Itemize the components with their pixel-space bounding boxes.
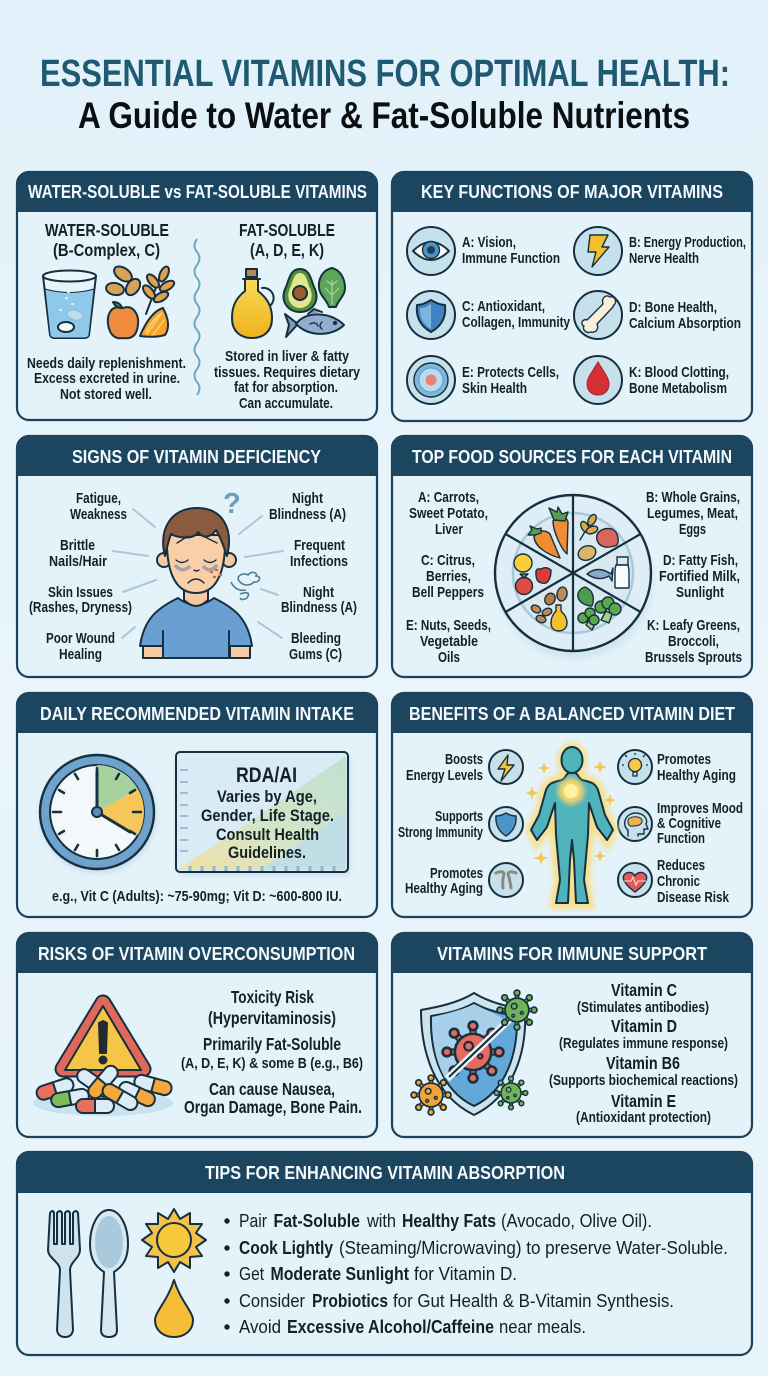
text: toxicity risk: (Hypervitaminosis) — [208, 1008, 336, 1028]
benefit labels left: Boosts — [445, 751, 483, 768]
column title: fat-soluble: (A, D, E, K) — [250, 240, 324, 260]
text: RDA/AI: Varies by Age, — [217, 787, 317, 806]
icon: heart — [618, 863, 652, 897]
panel: food sources — [392, 436, 752, 677]
connector lines — [113, 509, 283, 638]
text: immune vitamins — [549, 980, 738, 1126]
benefit labels left — [398, 751, 483, 897]
panel: absorption tips — [17, 1152, 752, 1355]
icon: pile of pills — [33, 1063, 173, 1116]
text: symptoms: Can cause Nausea, — [209, 1079, 335, 1099]
text: primarily fat-soluble: (A, D, E, K) & some B (e.g., B6) — [181, 1055, 363, 1072]
text: RDA/AI: RDA/AI — [236, 764, 297, 787]
icon: oil bottle — [232, 269, 274, 338]
food labels right: Legumes, Meat, — [647, 505, 738, 522]
food labels left: E: Nuts, Seeds, — [406, 617, 491, 634]
text: vitamin D: D: Bone Health, — [629, 299, 717, 316]
panel: deficiency signs — [17, 436, 377, 677]
tip 4: Probiotics — [312, 1291, 388, 1311]
text: vitamin E: Skin Health — [462, 380, 527, 397]
text: vitamin E: E: Protects Cells, — [462, 364, 559, 381]
benefit labels right: Chronic — [657, 873, 700, 890]
card: RDA/AI chart card — [176, 752, 350, 875]
text: fat-soluble notes: Stored in liver & fatty — [225, 348, 350, 365]
tip 1 — [224, 1211, 652, 1231]
text: vitamin A: A: Vision, — [462, 234, 516, 251]
panel: overconsumption risks — [17, 933, 377, 1137]
icon: shield — [407, 291, 455, 339]
text: immune vitamins: Vitamin E — [611, 1091, 676, 1111]
food labels left: Vegetable — [420, 633, 478, 650]
text: vitamin C: C: Antioxidant, — [462, 298, 545, 315]
benefit labels left: Energy Levels — [406, 767, 483, 784]
tip 3: for Vitamin D. — [414, 1264, 517, 1284]
food labels right: Brussels Sprouts — [645, 649, 742, 666]
icon: shield with viruses — [411, 990, 537, 1115]
text: water-soluble notes: Not stored well. — [60, 386, 152, 403]
symptom labels left: Fatigue, — [76, 490, 121, 507]
food labels right: Broccoli, — [668, 633, 719, 650]
tip 4: Consider — [239, 1291, 305, 1311]
tip 2: (Steaming/Microwaving) to preserve Water-Soluble. — [339, 1238, 728, 1258]
tip 1: with — [366, 1211, 396, 1231]
icon: fork — [48, 1211, 80, 1337]
symptom labels left: Skin Issues — [48, 584, 113, 601]
icon: energy — [489, 750, 523, 784]
food labels left: C: Citrus, — [421, 552, 475, 569]
food: greens and broccoli — [578, 587, 621, 630]
benefit labels right: Improves Mood — [657, 800, 743, 817]
panel: daily intake — [17, 693, 377, 917]
heading: intake: DAILY RECOMMENDED VITAMIN INTAKE — [40, 703, 354, 724]
text: symptoms — [184, 1079, 362, 1117]
food labels left: Bell Peppers — [412, 584, 484, 601]
text: immune vitamins: (Stimulates antibodies) — [577, 999, 709, 1016]
symptom labels right: Gums (C) — [289, 646, 342, 663]
food labels left: Sweet Potato, — [409, 505, 488, 522]
tip 3: Get — [239, 1264, 264, 1284]
text: vitamin C — [462, 298, 571, 331]
symptom labels right: Infections — [290, 553, 348, 570]
text: vitamin K — [629, 364, 729, 397]
text: water-soluble notes: Excess excreted in urine. — [34, 370, 180, 387]
heading: key functions: KEY FUNCTIONS OF MAJOR VITAMINS — [421, 181, 723, 202]
food: fish and milk — [587, 557, 629, 588]
food labels right: K: Leafy Greens, — [647, 617, 740, 634]
text: RDA/AI: Gender, Life Stage. — [201, 806, 334, 825]
heading: immune support: VITAMINS FOR IMMUNE SUPPORT — [437, 943, 708, 964]
benefit labels right: Healthy Aging — [657, 767, 736, 784]
text: fat-soluble notes — [214, 348, 361, 412]
icon: blood drop — [574, 356, 622, 404]
food: carrots — [528, 507, 568, 558]
food: nuts and oil — [530, 586, 568, 631]
tip 3 — [224, 1264, 517, 1284]
benefit labels right: Function — [657, 830, 705, 847]
icon: avocado and leaf — [284, 268, 345, 312]
tip 1: Pair — [239, 1211, 267, 1231]
benefit labels left: Strong Immunity — [398, 824, 483, 841]
text: vitamin K: K: Blood Clotting, — [629, 364, 729, 381]
symptom labels right: Bleeding — [291, 630, 341, 647]
food labels left: A: Carrots, — [418, 489, 479, 506]
food labels right: Sunlight — [676, 584, 724, 601]
food labels right — [645, 489, 742, 666]
column title: water-soluble — [45, 220, 169, 260]
text: immune vitamins: (Antioxidant protection) — [576, 1109, 711, 1126]
text: vitamin E — [462, 364, 559, 397]
illustration: tired person — [140, 508, 252, 658]
tip 3: Moderate Sunlight — [270, 1264, 409, 1284]
icon: eye — [407, 227, 455, 275]
tip 1: (Avocado, Olive Oil). — [501, 1211, 652, 1231]
icon: light bulb — [618, 750, 652, 784]
icon: warning triangle — [63, 1003, 143, 1070]
icon: question mark: ? — [223, 488, 241, 520]
chart: divided food plate — [495, 495, 653, 659]
heading: tips: TIPS FOR ENHANCING VITAMIN ABSORPTION — [205, 1162, 565, 1183]
benefit labels left: Promotes — [430, 865, 483, 882]
text: vitamin K: Bone Metabolism — [629, 380, 727, 397]
column title: water-soluble: WATER-SOLUBLE — [45, 220, 169, 240]
benefit labels right: & Cognitive — [657, 815, 721, 832]
icon: lightning bolt — [574, 227, 622, 275]
icon: brain — [618, 807, 652, 841]
symptom labels right: Frequent — [294, 537, 345, 554]
tip 5: near meals. — [499, 1317, 586, 1337]
food labels right: Eggs — [679, 521, 706, 538]
text: toxicity risk — [208, 987, 336, 1028]
food labels left: Oils — [438, 649, 460, 666]
icon: oil drop — [155, 1280, 193, 1337]
text: immune vitamins: (Regulates immune response) — [559, 1035, 728, 1052]
tip 4 — [224, 1291, 674, 1311]
benefit labels left: Healthy Aging — [405, 880, 483, 897]
text: symptoms: Organ Damage, Bone Pain. — [184, 1097, 362, 1117]
food: grain, meat, nuts — [576, 513, 618, 563]
tip 4: for Gut Health & B-Vitamin Synthesis. — [393, 1291, 674, 1311]
heading: deficiency: SIGNS OF VITAMIN DEFICIENCY — [72, 446, 322, 467]
icon: fish — [285, 309, 344, 337]
icon: sun — [142, 1209, 206, 1272]
icon: water glass with tablets — [43, 270, 96, 338]
heading: water vs fat: WATER-SOLUBLE vs FAT-SOLUBLE VITAMINS — [28, 181, 367, 202]
symptom labels right: Night — [292, 490, 323, 507]
panel: water-soluble vs fat-soluble — [17, 172, 377, 420]
icon: bone — [574, 291, 622, 339]
tip 5: Excessive Alcohol/Caffeine — [287, 1317, 494, 1337]
icon: joints — [489, 863, 523, 897]
icon: clock with shaded sectors — [40, 755, 156, 873]
text: vitamin B — [629, 234, 746, 267]
sparkles — [526, 761, 615, 864]
benefit labels left: Supports — [435, 808, 483, 825]
symptom labels left: Healing — [59, 646, 102, 663]
symptom labels right: Blindness (A) — [281, 599, 357, 616]
text: RDA/AI: Guidelines. — [228, 843, 306, 862]
text: water-soluble notes — [27, 355, 186, 403]
text: vitamin A: Immune Function — [462, 250, 560, 267]
panel: key functions — [392, 172, 752, 421]
food labels left — [406, 489, 491, 666]
text: water-soluble notes: Needs daily replenishment. — [27, 355, 186, 372]
benefit labels right: Reduces — [657, 857, 705, 874]
text: vitamin D: Calcium Absorption — [629, 315, 741, 332]
divider: wavy line — [194, 239, 200, 395]
text: RDA/AI — [201, 764, 334, 862]
food labels right: B: Whole Grains, — [646, 489, 740, 506]
tip 5: Avoid — [239, 1317, 281, 1337]
title — [40, 53, 730, 136]
text: fat-soluble notes: fat for absorption. — [234, 379, 338, 396]
text: vitamin A — [462, 234, 560, 267]
text: fat-soluble notes: Can accumulate. — [239, 395, 333, 412]
heading: risks: RISKS OF VITAMIN OVERCONSUMPTION — [38, 943, 355, 964]
food labels left: Liver — [435, 521, 463, 538]
illustration: glowing body figure — [526, 742, 615, 903]
symptom labels right: Night — [303, 584, 334, 601]
list: tips — [224, 1211, 728, 1337]
text: immune vitamins: Vitamin B6 — [606, 1053, 680, 1073]
text: primarily fat-soluble — [181, 1034, 363, 1072]
symptom labels right — [269, 490, 357, 663]
food labels right: D: Fatty Fish, — [663, 552, 738, 569]
symptom labels left: Nails/Hair — [49, 553, 107, 570]
symptom labels left: (Rashes, Dryness) — [29, 599, 132, 616]
symptom labels left — [29, 490, 132, 663]
tip 1: Fat-Soluble — [274, 1211, 360, 1231]
column title: fat-soluble — [239, 220, 335, 260]
icon: cell — [407, 356, 455, 404]
tip 2: Cook Lightly — [239, 1238, 333, 1258]
text: vitamin B: Nerve Health — [629, 250, 699, 267]
benefit labels right — [657, 751, 743, 906]
text: immune vitamins: Vitamin D — [611, 1016, 677, 1036]
icon: breath cloud — [231, 572, 260, 600]
text: toxicity risk: Toxicity Risk — [231, 987, 314, 1007]
tip 1: Healthy Fats — [402, 1211, 496, 1231]
food: fruit — [514, 554, 551, 594]
text: immune vitamins: Vitamin C — [611, 980, 677, 1000]
tip 5 — [224, 1317, 586, 1337]
benefit labels right: Promotes — [657, 751, 711, 768]
icon: spoon — [90, 1210, 128, 1337]
text: vitamin D — [629, 299, 741, 332]
text: RDA/AI: Consult Health — [216, 825, 319, 844]
text: intake example: e.g., Vit C (Adults): ~75-90mg; Vit D: ~600-800 IU. — [52, 888, 342, 905]
food labels right: Fortified Milk, — [659, 568, 740, 585]
column title: water-soluble: (B-Complex, C) — [53, 240, 160, 260]
panel: immune support — [392, 933, 752, 1137]
icon: immunity shield — [489, 807, 523, 841]
text: fat-soluble notes: tissues. Requires dietary — [214, 364, 361, 381]
food labels left: Berries, — [426, 568, 471, 585]
panel: benefits — [392, 693, 752, 917]
text: primarily fat-soluble: Primarily Fat-Soluble — [203, 1034, 341, 1054]
symptom labels left: Brittle — [60, 537, 95, 554]
benefit labels right: Disease Risk — [657, 889, 730, 906]
column title: fat-soluble: FAT-SOLUBLE — [239, 220, 335, 240]
icon: grains and fruit — [105, 263, 176, 338]
symptom labels right: Blindness (A) — [269, 506, 346, 523]
symptom labels left: Weakness — [70, 506, 127, 523]
text: vitamin C: Collagen, Immunity — [462, 314, 571, 331]
symptom labels left: Poor Wound — [46, 630, 115, 647]
